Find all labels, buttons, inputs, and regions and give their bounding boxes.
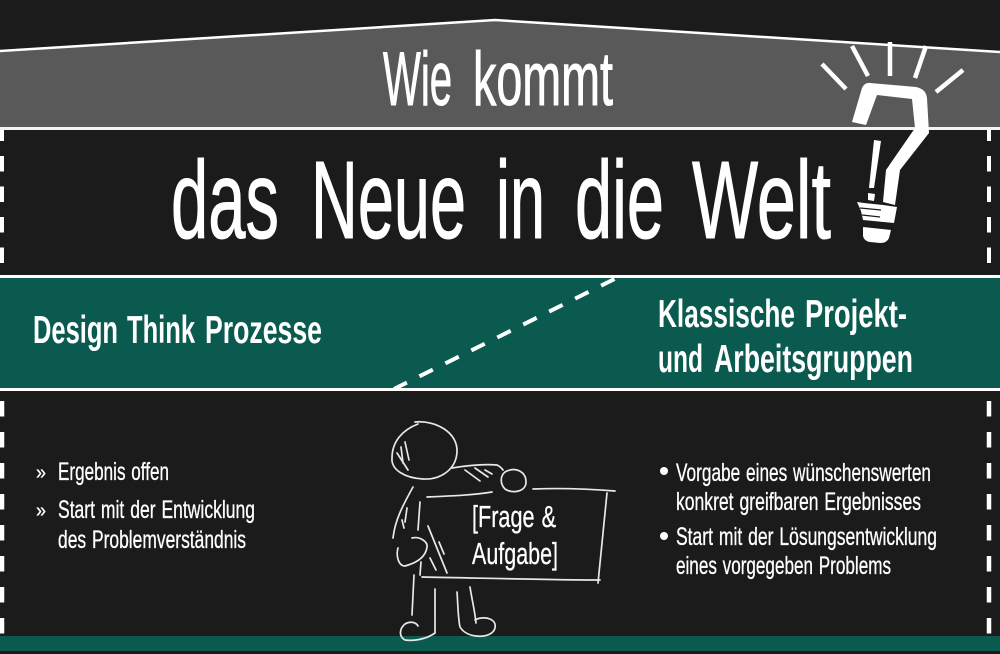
heading: Design Think Prozesse: Design bbox=[33, 309, 118, 352]
bottom teal band bbox=[0, 636, 1000, 651]
text block: design thinking points: des Problemverständnis bbox=[58, 526, 246, 554]
sign text bbox=[472, 499, 558, 571]
heading: Wie kommt: Wie bbox=[383, 37, 452, 122]
figure body bbox=[393, 487, 447, 573]
text block: design thinking points: Start mit der Entwicklung bbox=[58, 496, 255, 524]
heading: Design Think Prozesse bbox=[33, 309, 322, 352]
text block: design thinking points bbox=[36, 458, 255, 554]
heading: Design Think Prozesse: Prozesse bbox=[205, 309, 322, 352]
sign text: Aufgabe] bbox=[472, 536, 558, 571]
heading: Design Think Prozesse: Think bbox=[127, 309, 195, 352]
icon: light rays bbox=[822, 42, 963, 92]
title: das Neue in die Welt: Welt bbox=[692, 139, 831, 262]
roof panel bbox=[0, 20, 1000, 130]
icon: question mark light bulb bbox=[822, 42, 963, 243]
text block: classic project group points: eines vorgegeben Problems bbox=[676, 552, 891, 580]
heading: Wie kommt: kommt bbox=[473, 37, 613, 122]
text block: classic project group points bbox=[660, 459, 937, 580]
sign frame bbox=[422, 489, 615, 583]
title: das Neue in die Welt bbox=[171, 139, 831, 262]
title: das Neue in die Welt: Neue bbox=[311, 139, 466, 262]
sign text: [Frage & bbox=[472, 499, 556, 534]
title: das Neue in die Welt: die bbox=[575, 139, 664, 262]
title: das Neue in die Welt: in bbox=[496, 139, 545, 262]
figure legs and feet bbox=[400, 562, 495, 640]
heading: Klassische Projekt- und Arbeitsgruppen: und bbox=[658, 338, 703, 381]
side dashes: title section bbox=[2, 130, 989, 276]
heading: Klassische Projekt- und Arbeitsgruppen: Klassische bbox=[658, 293, 795, 336]
text block: design thinking points: » bbox=[36, 462, 46, 484]
side dashes: content section bbox=[2, 401, 989, 636]
sketch: figure holding sign bbox=[392, 422, 615, 640]
figure head bbox=[392, 422, 457, 479]
title: das Neue in die Welt: das bbox=[171, 139, 279, 262]
text block: design thinking points: » bbox=[36, 500, 46, 522]
heading: Wie kommt bbox=[383, 37, 613, 122]
figure arm and hand bbox=[427, 465, 526, 497]
panel: teal header band bbox=[0, 275, 1000, 391]
text block: design thinking points: Ergebnis offen bbox=[58, 458, 169, 486]
heading: Klassische Projekt- und Arbeitsgruppen: Arbeitsgruppen bbox=[714, 338, 913, 381]
heading: Klassische Projekt- und Arbeitsgruppen: Projekt- bbox=[805, 293, 907, 336]
heading: Klassische Projekt- und Arbeitsgruppen bbox=[658, 293, 913, 381]
diagonal dashed divider bbox=[394, 279, 614, 389]
